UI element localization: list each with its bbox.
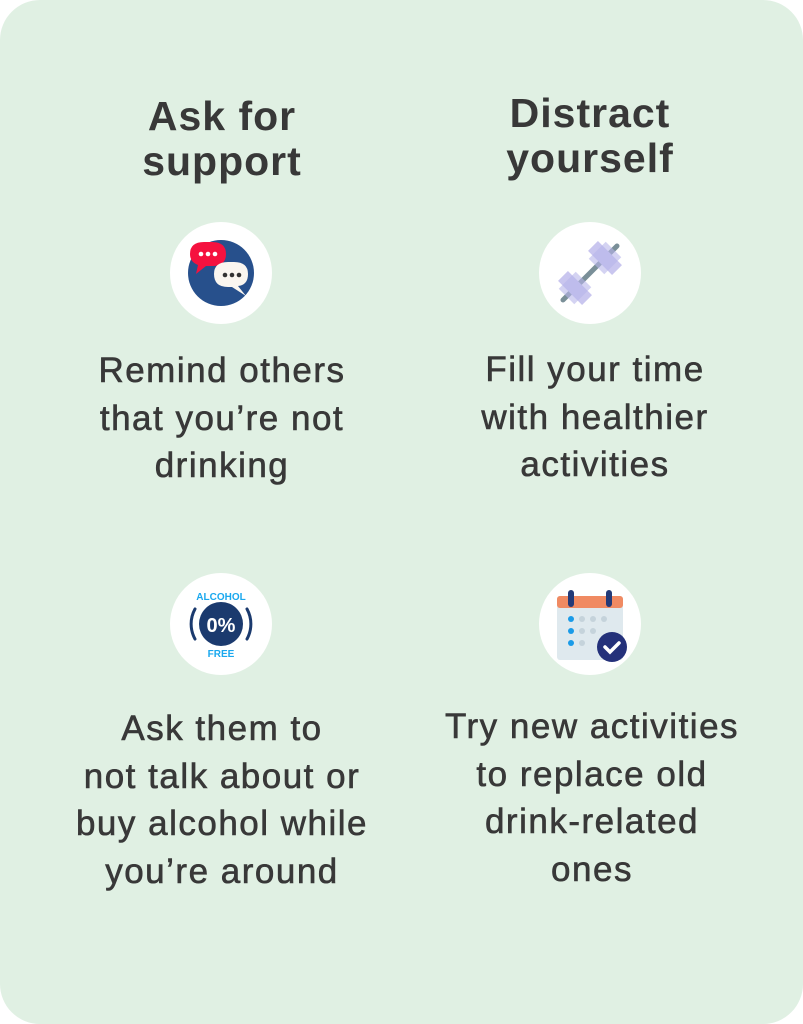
- icon: alcohol free badge: ALCOHOL: [196, 592, 246, 603]
- heading: distract yourself: [506, 90, 674, 181]
- icon: chat bubbles: [170, 222, 272, 324]
- text: fill your time: with healthier: [481, 398, 709, 436]
- heading: ask for support: support: [142, 138, 302, 184]
- text: ask them: buy alcohol while: [76, 804, 368, 843]
- heading: ask for support: [142, 93, 302, 184]
- text: try new activities: drink-related: [485, 802, 699, 841]
- icon: calendar check: [539, 573, 641, 675]
- text: ask them: [76, 709, 368, 891]
- text: fill your time: [481, 350, 709, 484]
- icon: dumbbell: [539, 222, 641, 324]
- text: try new activities: to replace old: [476, 754, 708, 794]
- text: try new activities: [445, 707, 739, 888]
- text: ask them: you’re around: [105, 852, 339, 890]
- text: remind others: that you’re not: [100, 398, 344, 438]
- heading: distract yourself: Distract: [510, 90, 670, 136]
- text: fill your time: Fill your time: [485, 350, 705, 389]
- icon: alcohol free badge: 0%: [207, 615, 236, 637]
- icon: alcohol free badge: FREE: [208, 649, 235, 660]
- text: remind others: [98, 351, 346, 485]
- text: fill your time: activities: [520, 445, 670, 484]
- text: try new activities: ones: [551, 850, 633, 888]
- text: try new activities: Try new activities: [445, 707, 739, 746]
- heading: distract yourself: yourself: [506, 135, 674, 181]
- heading: ask for support: Ask for: [148, 93, 296, 139]
- text: remind others: drinking: [155, 446, 289, 485]
- text: ask them: not talk about or: [84, 756, 360, 796]
- text: ask them: Ask them to: [121, 709, 323, 748]
- text: remind others: Remind others: [98, 351, 346, 390]
- icon: alcohol free badge: [170, 573, 272, 675]
